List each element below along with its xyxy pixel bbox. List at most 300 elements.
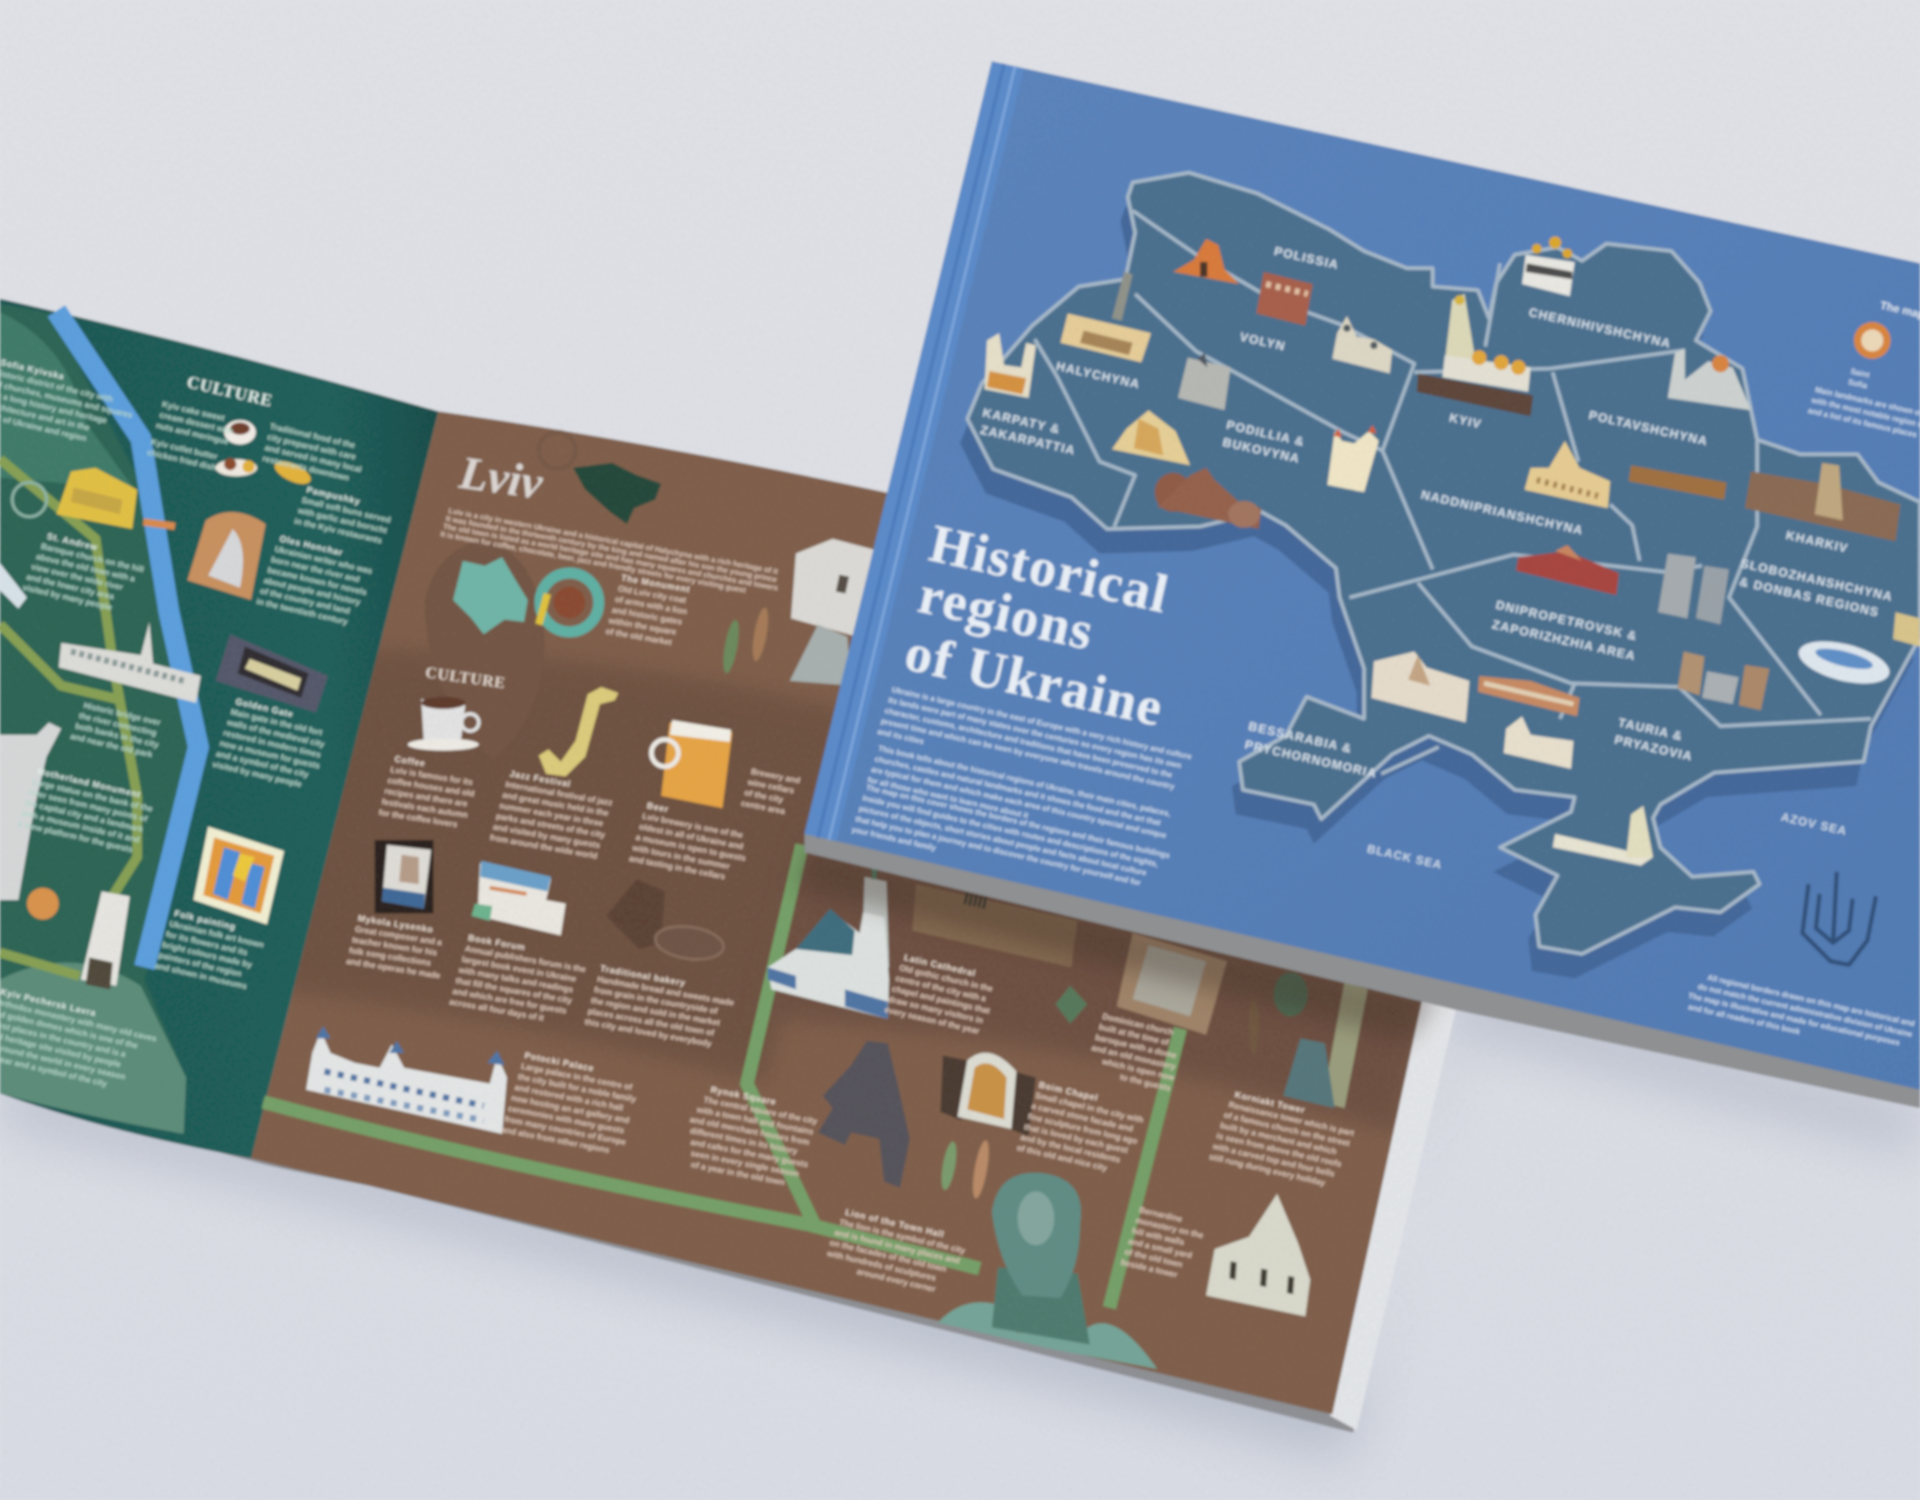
- text block: route: with a town hall and fountains: [695, 1104, 815, 1137]
- text block: coffee: Lviv is famous for its: [390, 764, 474, 787]
- text block: gate: now a museum for guests: [219, 738, 321, 771]
- title: [900, 513, 1175, 738]
- text block: palace: the city built for a noble family: [517, 1071, 637, 1104]
- title: regions: [913, 564, 1100, 662]
- icon: bell tower: [1283, 982, 1368, 1108]
- map labels: KHARKIV: [1785, 528, 1850, 556]
- icon: white gabled church: [1206, 1194, 1310, 1316]
- text block: cover paragraph three: pictures of the objects, short stories about people and facts about local culture: [858, 804, 1148, 878]
- text block: upper brown: draw so many visitors in: [887, 994, 984, 1025]
- text block: lion right: hill with walls: [1131, 1225, 1186, 1247]
- text block: book: with many talks and readings: [457, 964, 574, 994]
- text block: gate shrine: fine sculpture from long ago: [1027, 1111, 1139, 1146]
- text block: green centre 1: [22, 528, 147, 617]
- text block: gate shrine: Boim Chapel: [1038, 1080, 1099, 1103]
- text block: culture left: Kyiv cutlet butter: [150, 436, 219, 462]
- text block: portrait: folk song collections: [348, 945, 432, 968]
- text block: tan: to the guests: [1119, 1072, 1172, 1093]
- text block: bakery: [584, 962, 737, 1051]
- text block: painting: for its flowers and its: [165, 929, 249, 957]
- light green city area: [0, 304, 202, 1134]
- text block: culture left: nuts and meringue: [155, 420, 230, 446]
- text block: right: still rung during every holiday: [1208, 1151, 1327, 1188]
- text block: coffee: coffee houses and old: [387, 775, 475, 799]
- map shadow: [960, 197, 1913, 978]
- text block: culture third: Small soft buns served: [301, 495, 392, 525]
- icon: colourful painting: [193, 827, 284, 924]
- text block: gate: visited by many people: [211, 759, 303, 789]
- text block: Lviv intro: The old town is listed as a world heritage site and has many squares and churches and towers: [442, 522, 779, 592]
- text block: tan: baroque with a dome: [1094, 1032, 1178, 1060]
- text block: green centre 3: Large statue on the bank of the: [31, 776, 154, 814]
- orange bridge: [143, 518, 175, 530]
- icon: white castle: [790, 539, 879, 686]
- icon: brown long building: [1629, 465, 1727, 500]
- icon: teal region map: [453, 557, 528, 634]
- text block: jazz: and great music held in the: [502, 790, 610, 818]
- text block: beer: and tasting in the cellars: [628, 853, 726, 881]
- text block: bakery: places across all the old town of: [587, 1006, 715, 1038]
- text block: cover caption bottom right: do not match the current administrative division of Ukraine: [1697, 982, 1914, 1039]
- white page stack: [1330, 989, 1457, 1430]
- text block: cover paragraph one: Ukraine is a large country in the east of Europe with a very rich history and culture: [891, 685, 1193, 761]
- text block: cover paragraph one: Its lands were part of many states over the centuries so every region has its own: [887, 695, 1182, 770]
- text block: upper brown: Latin Cathedral: [903, 952, 977, 978]
- text block: right: [1208, 1087, 1358, 1192]
- text block: lion left: [823, 1205, 969, 1299]
- text block: cover paragraph one: character, customs, architecture and traditions that have been preserved to the: [884, 706, 1174, 780]
- icon: portrait on orange panel: [187, 512, 266, 600]
- text block: green bottom: [0, 983, 160, 1097]
- icon: white long building: [59, 622, 201, 703]
- text block: portrait: Ukrainian writer who was: [274, 544, 374, 576]
- text block: green centre 1: St. Andrew: [46, 531, 99, 552]
- text block: cover paragraph two: churches, castles and natural landmarks and it shows the food and the art that: [874, 754, 1162, 827]
- text block: culture right: [262, 421, 368, 485]
- text block: upper brown: [884, 951, 999, 1037]
- text block: right: with a carved top and four bells: [1211, 1141, 1336, 1179]
- title: Historical: [924, 513, 1175, 625]
- text block: gate: and a symbol of the city: [215, 748, 310, 779]
- text block: upper brown: every season of the year: [884, 1004, 981, 1036]
- text block: cover paragraph two: [867, 743, 1173, 851]
- text block: gate shrine: a carved stone facade and: [1031, 1100, 1134, 1134]
- icon: red castle: [1256, 272, 1313, 326]
- text block: painting: bright colours made by: [161, 939, 253, 970]
- icon: white stacked book: [471, 861, 566, 936]
- text block: right cut: centre area: [740, 798, 786, 816]
- soft shadows on the paper: [0, 980, 1920, 1457]
- text block: green centre 3: with a museum inside of it and: [19, 807, 141, 845]
- shadow cast by the closed book: [796, 845, 1439, 1041]
- text block: bakery: the region and sold in the market: [590, 995, 721, 1028]
- text block: right: built by a merchant and which: [1219, 1120, 1338, 1156]
- text block: upper brown: centre of the city with a: [895, 973, 987, 1003]
- map labels: & DONBAS REGIONS: [1738, 575, 1880, 620]
- text block: palace: Large palace in the centre of: [520, 1061, 633, 1092]
- text block: painting: [154, 906, 267, 993]
- icon: stadium: [1794, 633, 1894, 692]
- text block: right: of a famous church on the street: [1223, 1109, 1351, 1148]
- text block: gate: restored in modern times: [222, 727, 322, 760]
- map labels: PRYAZOVIA: [1613, 733, 1694, 764]
- text block: portrait: Great composer and a: [354, 924, 443, 947]
- text block: tan: built at the time of: [1098, 1021, 1170, 1047]
- text block: green centre 2: [69, 699, 165, 760]
- river: [56, 311, 198, 967]
- icon: right cut building: [1893, 612, 1920, 647]
- text block: beer: a museum is open to guests: [635, 832, 747, 863]
- text block: green centre 3: [17, 764, 157, 857]
- text block: palace: and also from other regions: [501, 1124, 611, 1155]
- faint ring: [539, 432, 576, 469]
- icon: cream towers: [1327, 425, 1379, 492]
- text block: book: Annual publishers forum is the: [464, 943, 587, 974]
- text block: book: Book Forum: [467, 933, 526, 952]
- map labels: POLISSIA: [1273, 244, 1340, 272]
- icon: round target: [12, 482, 47, 517]
- text block: beer: Lviv brewery is one of the: [642, 811, 744, 840]
- map labels: VOLYN: [1239, 330, 1287, 354]
- text block: bakery: Handmade bread and sweets made: [597, 974, 735, 1008]
- text block: tan: Dominican church: [1102, 1011, 1174, 1037]
- text block: book: and which are free for guests: [452, 986, 568, 1016]
- text block: palace: Potocki Palace: [524, 1050, 595, 1073]
- lower green hill: [0, 963, 186, 1134]
- dark tonal bands: [251, 649, 1439, 1133]
- text block: green bottom: Kyiv Pechersk Lavra: [0, 986, 97, 1018]
- text block: gate shrine: of this old and nice city: [1016, 1142, 1109, 1173]
- icon: trident emblem: [1802, 872, 1876, 965]
- text block: Lviv intro: It was founded in the thirteenth century by the king and named after his son the young prince: [445, 514, 778, 584]
- text block: green centre 1: Baroque church on the hill: [40, 541, 145, 574]
- text block: portrait: Mykola Lysenko: [357, 913, 434, 935]
- map labels: [979, 244, 1894, 781]
- text block: cover paragraph one: [877, 684, 1193, 804]
- olive route: [0, 459, 137, 976]
- legend: caption: Sofia: [1847, 377, 1869, 391]
- text block: lion right: [1120, 1203, 1207, 1283]
- text block: painting: Ukrainian folk art known: [169, 918, 265, 950]
- text block: route: and old merchant houses from: [689, 1114, 810, 1147]
- upper green hill: [0, 312, 135, 490]
- icon: tan box building: [1117, 933, 1227, 1035]
- text: small railing: IIIII: [962, 888, 989, 913]
- text block: lion left: around every corner: [856, 1266, 937, 1294]
- teal page base: [0, 299, 438, 1158]
- text block: right: Korniakt Tower: [1234, 1089, 1306, 1115]
- icon: large fortress: [1745, 463, 1900, 541]
- icon: gate shrine: [940, 1053, 1036, 1136]
- icon: food plates: [216, 420, 314, 489]
- text block: book: that fill the squares of the city: [455, 975, 573, 1005]
- text block: green centre 2: and near the old park: [69, 731, 154, 760]
- icon: orange sun legend: [1854, 322, 1891, 359]
- legend: sea label Black Sea: BLACK SEA: [1366, 842, 1443, 872]
- map labels: PRYCHORNOMORIA: [1243, 737, 1378, 781]
- text block: portrait: and the operas he made: [346, 956, 441, 981]
- text block: monument: of the old market: [605, 626, 673, 647]
- map labels: SLOBOZHANSHCHYNA: [1739, 556, 1894, 604]
- icon: grey castle: [1178, 353, 1231, 410]
- icon: grey twin towers: [1658, 553, 1729, 624]
- text block: route: of a year in the old town: [690, 1159, 786, 1187]
- text block: route: and cafes for the many guests: [690, 1137, 809, 1169]
- map labels: CHERNIHIVSHCHYNA: [1528, 305, 1672, 351]
- text block: green centre 3: Motherland Monument: [36, 766, 142, 800]
- text block: right cut: Brewery and: [750, 766, 801, 785]
- text block: palace: and restored with a rich hall: [514, 1082, 624, 1113]
- blue cover: [804, 61, 1920, 1090]
- text block: coffee: for the coffee lovers: [378, 807, 459, 829]
- text block: gate: [211, 694, 331, 792]
- text block: green centre 3: a view platform for the guests: [17, 818, 134, 854]
- text block: green page top left: [0, 354, 139, 452]
- icon: dark gate: [216, 634, 328, 713]
- icon: beer mug: [651, 720, 732, 808]
- text block: right cut: wine cellars: [746, 776, 795, 795]
- text block: right: is seen from above the old roofs: [1216, 1130, 1343, 1169]
- text block: portrait: born near the river and: [270, 554, 361, 584]
- text block: portrait: [256, 532, 376, 630]
- text block: lion right: beside a tower: [1120, 1257, 1179, 1280]
- map labels: DNIPROPETROVSK &: [1494, 598, 1639, 643]
- text block: book: largest book event in Ukraine: [461, 954, 577, 984]
- icon: small leaves: [939, 1139, 992, 1199]
- icon: Kyiv Lavra and domes: [1417, 294, 1533, 416]
- icon: white palace: [306, 1026, 507, 1134]
- text block: culture third: in the Kyiv restaurants: [293, 516, 383, 546]
- icon: leaves: [720, 607, 771, 674]
- text block: portrait: of the country and land: [259, 585, 351, 616]
- icon: dark tree and bread: [606, 879, 726, 963]
- icon: grey church: [1332, 316, 1392, 373]
- text block: culture right: Traditional food of the: [269, 421, 357, 450]
- text block: monument: The Monument: [620, 573, 691, 595]
- text block: right cut: of the city: [744, 787, 784, 805]
- text block: jazz: International festival of jazz: [505, 779, 613, 808]
- map labels: HALYCHYNA: [1055, 359, 1141, 392]
- text block: cover paragraph one: and its cities: [877, 727, 925, 746]
- text block: monument: within the square: [607, 615, 677, 637]
- icon: fountain railing: [912, 884, 1078, 967]
- text block: coffee: Coffee: [394, 754, 426, 768]
- text block: green centre 3: the capital city and a landmark: [24, 797, 145, 834]
- icon: brown castle: [1155, 468, 1261, 529]
- map labels: BESSARABIA &: [1247, 719, 1353, 756]
- brown page base: [251, 411, 1427, 1414]
- text block: culture left: Kyiv cake sweet: [161, 399, 226, 423]
- legend: description: and a list of its famous places: [1807, 406, 1918, 439]
- text block: cover paragraph three: your friends and family: [851, 825, 937, 853]
- legend: description: [1807, 384, 1920, 447]
- text block: cover paragraph three: that help you to plan a journey and to discover the country for yourself and for: [854, 814, 1142, 887]
- country outline: [967, 173, 1920, 954]
- icon: white Sumy cathedral: [1668, 349, 1751, 410]
- icon: coffee cup: [408, 697, 479, 751]
- icon: yellow cathedral: [1524, 441, 1610, 508]
- text block: route: different times in its history: [689, 1125, 799, 1156]
- text block: book: [449, 931, 589, 1029]
- text block: lion right: and a small yard: [1127, 1236, 1193, 1260]
- text block: gate shrine: Small chapel in the city with: [1034, 1090, 1145, 1125]
- legend: caption: [1847, 367, 1871, 391]
- text block: palace: ceremonies with many guests: [507, 1103, 626, 1135]
- text block: palace: from many countries of Europe: [504, 1114, 627, 1147]
- icon: blue striped object: [0, 563, 27, 609]
- text block: coffee: festivals each autumn: [381, 796, 468, 820]
- text block: portrait: in the twentieth century: [256, 596, 349, 627]
- text block: cover paragraph one: present time and which can be seen by everyone who travels around the country: [880, 716, 1176, 791]
- text block: book: across all four days of it: [449, 996, 545, 1023]
- text block: green centre 1: view over the wide river: [30, 561, 125, 592]
- map labels: ZAPORIZHZHIA AREA: [1491, 617, 1637, 663]
- text block: green centre 3: river seen from many points of: [28, 787, 149, 824]
- icon: white theatre: [1504, 716, 1573, 769]
- text block: monument: [605, 571, 692, 649]
- text block: gate: Main gate in the old fort: [230, 706, 324, 737]
- text block: portrait: [346, 912, 448, 981]
- text block: culture left: [146, 398, 237, 474]
- page block edge: [0, 980, 1457, 1433]
- text block: lion left: Lion of the Town Hall: [844, 1207, 945, 1239]
- text block: palace: now hosting an art gallery and: [510, 1092, 630, 1125]
- panel: brown Lviv page: [251, 411, 1439, 1414]
- text block: cover caption bottom right: All regional borders drawn on this map are historical and: [1706, 973, 1916, 1028]
- icon: red building: [1516, 545, 1619, 595]
- text block: culture left: chicken fried dish: [146, 447, 217, 472]
- text block: cover caption bottom right: and for all readers of this book: [1687, 1002, 1801, 1036]
- dark drop shape: [425, 539, 545, 759]
- icon: small Ukraine map: [573, 463, 661, 524]
- text block: beer: with tours in the summer: [631, 842, 731, 871]
- text block: green centre 1: above the old town with a: [35, 551, 136, 584]
- icon: horse rider statue: [818, 1041, 910, 1188]
- text block: bakery: Traditional bakery: [600, 963, 686, 988]
- text block: culture third: with garlic and borscht: [296, 505, 388, 535]
- text block: lion left: and is found in many places and: [834, 1227, 961, 1266]
- heading: culture: CULTURE: [424, 664, 507, 692]
- icon: yellow hut: [1112, 410, 1190, 465]
- text block: portrait: about people and history: [263, 575, 362, 607]
- map labels: ZAKARPATTIA: [979, 423, 1077, 458]
- text block: right: Renaissance tower which is part: [1228, 1099, 1355, 1138]
- text block: portrait: Oles Honchar: [279, 533, 344, 558]
- icon: orange long building: [1478, 676, 1580, 716]
- panel: closed blue book cover: [804, 61, 1920, 1108]
- text block: painting: Folk painting: [173, 908, 237, 932]
- text block: green centre 2: the river connecting: [78, 710, 158, 738]
- text block: lion right: Bernardine: [1138, 1204, 1184, 1224]
- text block: gate shrine: [1016, 1078, 1147, 1178]
- text block: lion right: monastery on the: [1135, 1215, 1205, 1240]
- icon: trees: [1249, 972, 1308, 1056]
- text block: upper brown: Old gothic church in the: [898, 962, 994, 994]
- map labels: KYIV: [1448, 410, 1483, 431]
- text block: green centre 2: Historic bridge over: [83, 700, 162, 728]
- text block: green page top left: Sofia Kyivska: [0, 357, 65, 382]
- text block: cover paragraph three: [851, 782, 1171, 903]
- text block: jazz: summer each year in three: [498, 800, 604, 828]
- icon: saxophone: [539, 687, 618, 776]
- text block: bakery: from grain in the countryside of: [593, 984, 719, 1016]
- text block: jazz: from around the wide world: [489, 832, 598, 861]
- text block: bakery: this city and loved by everybody: [584, 1016, 713, 1049]
- text block: gate shrine: that is loved by each guest: [1023, 1121, 1129, 1155]
- icon: white monument: [0, 722, 61, 900]
- text block: beer: [628, 799, 753, 885]
- text block: right cut: [740, 765, 801, 818]
- icon: white column: [81, 891, 130, 989]
- spine: [804, 61, 1024, 841]
- text block: tan: which is open now: [1100, 1056, 1176, 1083]
- text block: route: [681, 1082, 821, 1191]
- icon: yellow building: [56, 468, 137, 529]
- map labels: TAURIA &: [1617, 715, 1684, 744]
- text block: jazz: parks and streets of the city: [495, 811, 606, 840]
- legend: caption: Saint: [1850, 367, 1871, 380]
- text block: route: seen in every single season: [690, 1148, 800, 1179]
- text block: cover paragraph two: for all those who want to learn more about it: [867, 775, 1029, 820]
- region borders: [1035, 211, 1871, 774]
- text block: tan: and an old monastery: [1091, 1042, 1177, 1072]
- text block: cover paragraph three: The map on this cover shows the borders of the regions and their famous buildings: [865, 783, 1171, 860]
- icon: diamond leaf: [1056, 986, 1087, 1024]
- text block: monument: of arms with a lion: [614, 594, 688, 616]
- map labels: BUKOVYNA: [1221, 435, 1301, 466]
- icon: white Chernihiv church: [1522, 236, 1575, 296]
- green route: [263, 845, 1180, 1308]
- text block: lion left: The lion is the symbol of the city: [838, 1217, 967, 1256]
- icon: portrait frame: [375, 840, 433, 913]
- icon: orange tree: [27, 888, 59, 920]
- text block: portrait: became known for novels: [267, 565, 368, 597]
- text block: jazz: [489, 767, 615, 862]
- map labels: NADDNIPRIANSHCHYNA: [1420, 488, 1585, 538]
- icon: orange fortress: [1173, 239, 1239, 284]
- icon: white long palace: [1371, 651, 1469, 722]
- text block: green centre 1: visited by many people: [22, 582, 113, 612]
- text block: monument: Old Lviv city coat: [617, 583, 687, 605]
- text block: lion left: on the facades of the old town: [829, 1237, 947, 1274]
- text block: culture left: cream dessert with: [159, 409, 234, 436]
- text block: Lviv intro: It is known for coffee, chocolate, beer, jazz and friendly streets for every visiting guest: [440, 529, 747, 595]
- panel: green left page: [0, 299, 438, 1158]
- text block: green centre 2: both banks in the city: [74, 721, 160, 750]
- text block: cover caption bottom right: [1685, 970, 1916, 1061]
- title: of Ukraine: [900, 622, 1169, 738]
- icon: Lviv opera yellow building: [1060, 272, 1151, 362]
- map labels: PODILLIA &: [1225, 418, 1306, 449]
- text block: tan: [1086, 1010, 1186, 1093]
- text block: upper brown: chapel and paintings that: [891, 983, 991, 1016]
- text block: route: Rynok Square: [710, 1084, 777, 1107]
- text block: gate: walls of the medieval city: [225, 717, 326, 749]
- text block: cover paragraph two: This book tells about the historical regions of Ukraine, their main cities, palaces,: [878, 744, 1171, 818]
- text block: gate: Golden Gate: [235, 696, 294, 719]
- text block: painting: and shown in museums: [154, 960, 248, 991]
- text block: gate shrine: and by the local residents: [1020, 1132, 1122, 1165]
- text block: monument: and historic gates: [611, 604, 683, 627]
- text block: painting: painters of the region: [158, 950, 243, 979]
- text block: cover paragraph two: are typical for them and which make each area of this country special and unique: [870, 765, 1168, 840]
- text block: beer: oldest in all of Ukraine and: [638, 821, 744, 851]
- text block: palace: [501, 1048, 641, 1158]
- text block: culture right: restaurants downtown: [262, 453, 350, 483]
- icon: green lion statue: [938, 1173, 1157, 1369]
- text block: beer: Beer: [646, 800, 670, 814]
- icon: Crimea palace: [1553, 806, 1653, 866]
